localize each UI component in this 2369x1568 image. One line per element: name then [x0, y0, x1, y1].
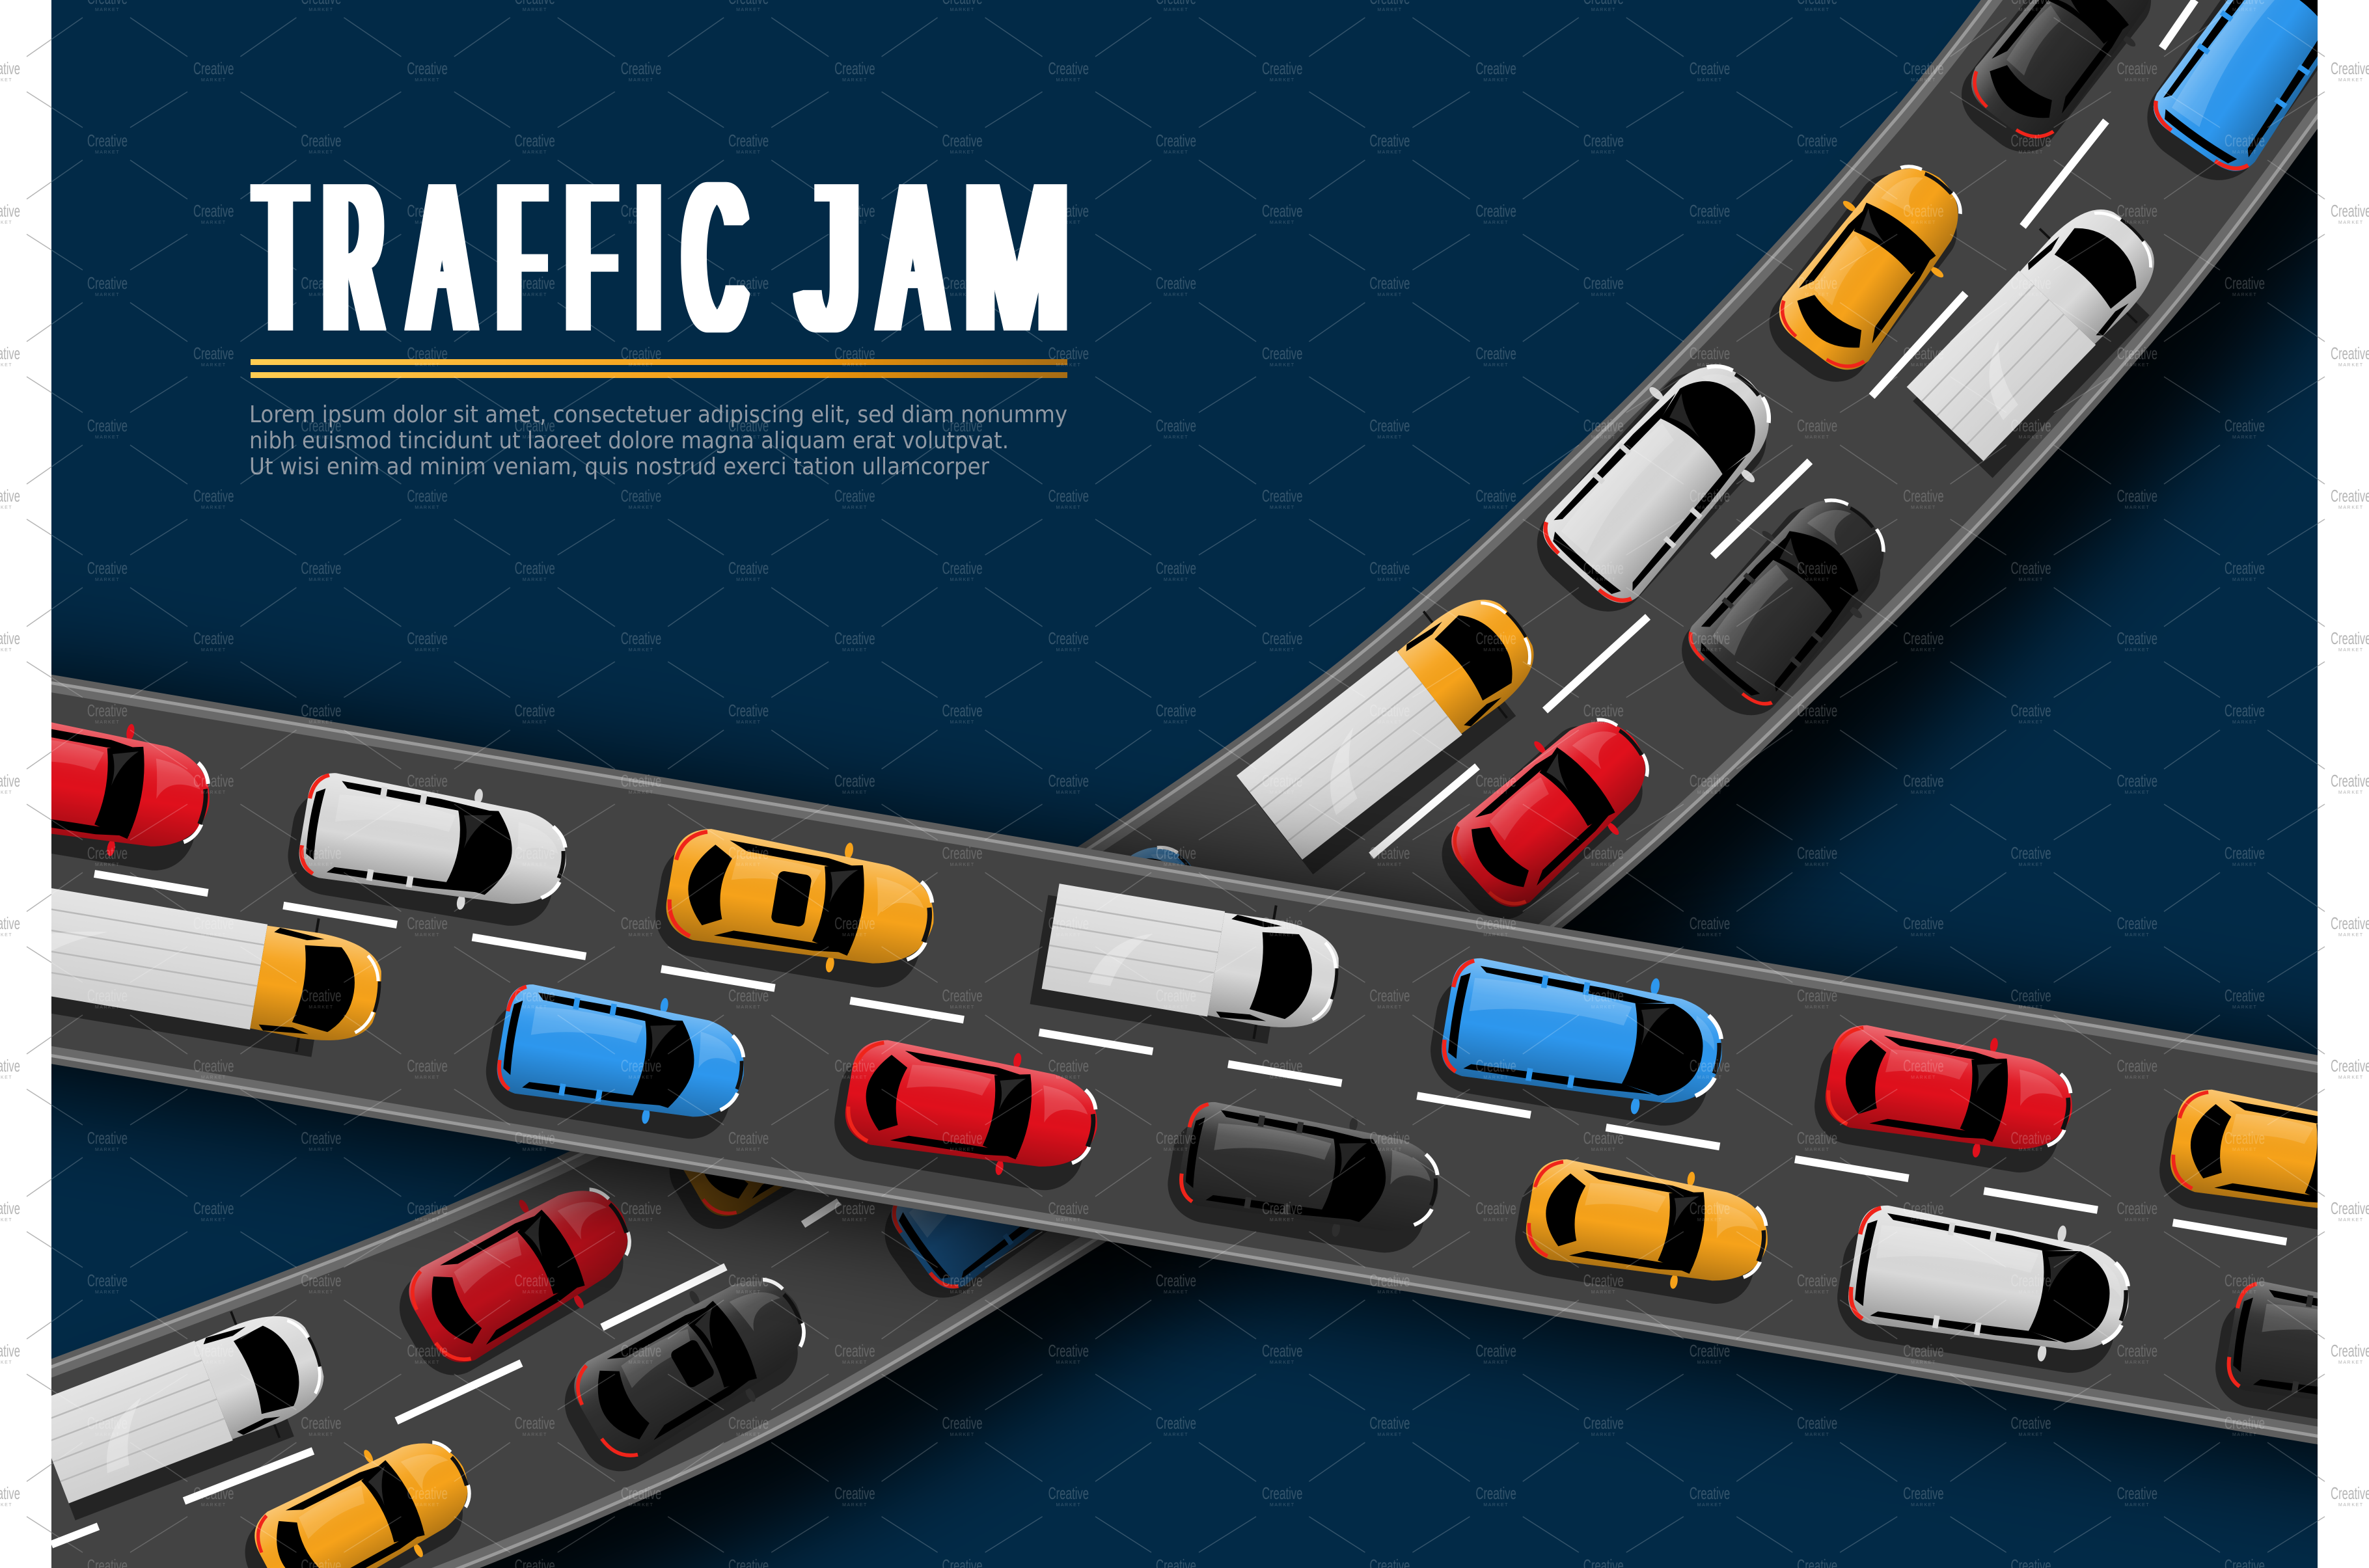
yellow cab truck	[1227, 570, 1562, 874]
yellow sedan	[1755, 141, 1990, 396]
straight road shadow	[0, 863, 2369, 1289]
hidden yellow car under overpass	[657, 1023, 918, 1242]
straight road lower lane cars	[0, 845, 2369, 1444]
yellow sedan	[1509, 1146, 1777, 1310]
black van	[1162, 1090, 1448, 1259]
body text: Ut wisi enim ad minim veniam, quis nostrud exerci tation ullamcorper	[249, 453, 989, 480]
yellow sedan lower	[232, 1413, 491, 1568]
red sedan right	[1809, 1012, 2082, 1178]
body text: Lorem ipsum dolor sit amet, consectetuer adipiscing elit, sed diam nonummy	[249, 401, 1067, 428]
yellow cab long truck	[0, 845, 390, 1066]
black van	[1667, 472, 1913, 731]
body text: nibh euismod tincidunt ut laoreet dolore magna aliquam erat volutpvat.	[249, 427, 1009, 454]
white truck	[1030, 868, 1348, 1053]
white truck lower	[25, 1288, 342, 1521]
straight overpass road	[0, 850, 2369, 1276]
white van	[1520, 334, 1802, 629]
white truck	[1893, 182, 2185, 478]
title: T	[258, 139, 303, 375]
title: A	[413, 139, 471, 375]
red sedan	[828, 1027, 1107, 1196]
straight road upper lane cars	[0, 697, 2369, 1243]
body text	[249, 401, 1067, 480]
title: I	[640, 139, 658, 375]
dark red sedan	[385, 1159, 653, 1388]
blue van	[1424, 945, 1733, 1132]
title: A	[883, 139, 943, 375]
title: R	[326, 139, 381, 375]
black car top	[1947, 0, 2184, 167]
yellow sedan with sunroof	[649, 815, 944, 994]
gold double rule	[251, 359, 1067, 378]
title: J	[801, 139, 858, 375]
title: F	[569, 139, 613, 375]
hidden blue car under overpass	[869, 1051, 1160, 1314]
title: M	[965, 139, 1068, 375]
curved road lower segment cars	[25, 1159, 828, 1568]
white van	[1831, 1193, 2140, 1379]
curved road upper segment cars	[1227, 0, 2369, 934]
title: F	[500, 139, 543, 375]
hidden blue car tip under overpass	[981, 820, 1223, 1043]
straight road lane dashes	[94, 874, 2343, 1251]
blue van top right	[2131, 0, 2369, 197]
title: C	[686, 139, 744, 375]
red sedan	[1427, 691, 1675, 934]
yellow sedan right edge	[2154, 1076, 2369, 1243]
black van right edge	[2210, 1269, 2369, 1444]
black sedan with sunroof	[551, 1249, 828, 1485]
blue hatchback	[480, 973, 754, 1144]
red sedan left	[0, 697, 220, 876]
white van	[282, 761, 576, 932]
